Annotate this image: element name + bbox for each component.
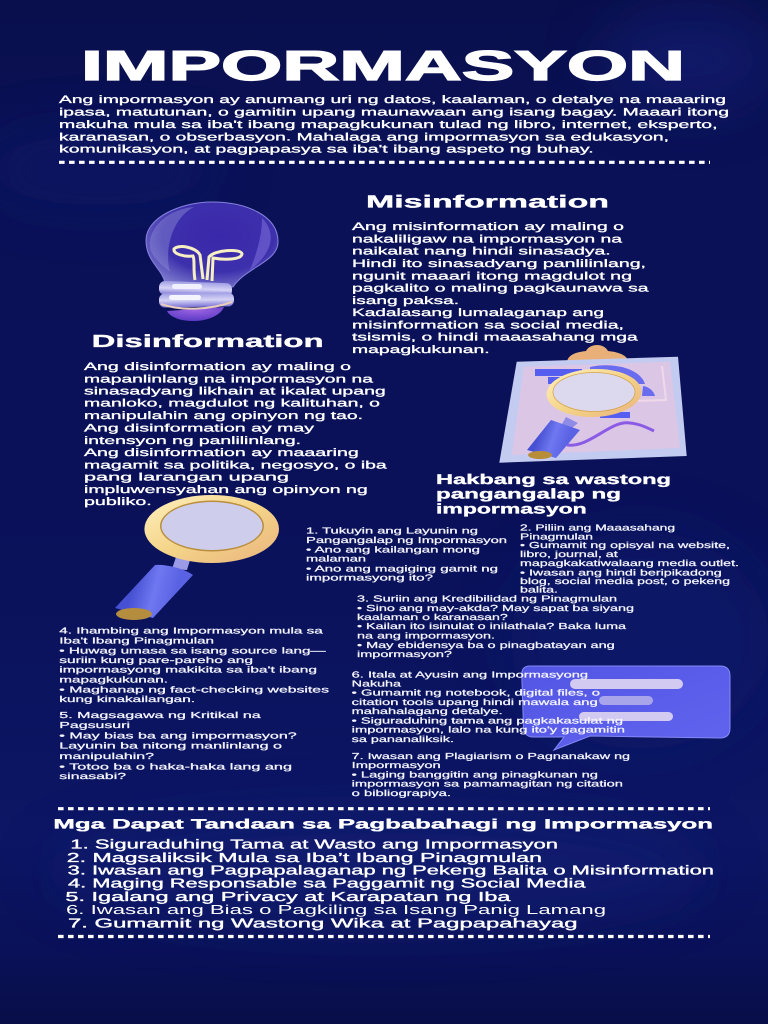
step 3: • Kailan ito isinulat o inilathala? Baka luma — [357, 621, 626, 631]
text block: disinformation: Ang disinformation ay may — [84, 422, 315, 434]
step 7: impormasyon sa pamamagitan ng citation — [352, 779, 623, 789]
text block: misinformation: Ang misinformation ay maling o — [352, 221, 624, 233]
text block: disinformation: publiko. — [84, 496, 152, 508]
step 6: 6. Itala at Ayusin ang Impormasyong — [352, 669, 588, 679]
icon: chat bubble — [522, 666, 730, 750]
text block: misinformation: pagkalito o maling pagkaunawa sa — [352, 283, 648, 295]
step 3 — [357, 594, 634, 659]
heading: reminders: Mga Dapat Tandaan sa Pagbabahagi ng Impormasyon — [53, 816, 713, 832]
step 2: libro, journal, at — [520, 549, 619, 559]
heading: steps: Hakbang sa wastong — [436, 471, 671, 487]
step 5: Pagsusuri — [59, 720, 130, 730]
step 5: manipulahin? — [59, 751, 154, 761]
step 5: sinasabi? — [59, 771, 126, 781]
step 7: • Laging banggitin ang pinagkunan ng — [352, 770, 598, 780]
title: IMPORMASYON — [81, 42, 685, 89]
step 4: suriin kung pare-pareho ang — [59, 655, 253, 665]
text block: misinformation: tsismis, o hindi maaasahang mga — [352, 332, 638, 344]
step 4: 4. Ihambing ang Impormasyon mula sa — [59, 625, 323, 635]
step 6: • Gumamit ng notebook, digital files, o — [352, 688, 600, 698]
list: reminders: 1. Siguraduhing Tama at Wasto ang Impormasyon — [70, 836, 558, 851]
text block: disinformation: mapanlinlang na impormasyon na — [84, 373, 373, 385]
text block: disinformation: manipulahin ang opinyon ng tao. — [84, 410, 363, 422]
step 6: • Siguraduhing tama ang pagkakasulat ng — [352, 715, 623, 725]
text block: misinformation: misinformation sa social media, — [352, 319, 624, 331]
step 2: • Gumamit ng opisyal na website, — [520, 540, 730, 550]
text block: misinformation: Kadalasang lumalaganap ang — [352, 307, 604, 319]
step 6: impormasyon, lalo na kung ito'y gagamitin — [352, 725, 625, 735]
step 2 — [520, 523, 739, 595]
text block: misinformation: ngunit maaari itong magdulot ng — [352, 270, 632, 282]
list: reminders: 2. Magsaliksik Mula sa Iba’t Ibang Pinagmulan — [67, 850, 542, 865]
text block: disinformation: intensyon ng panlilinlang. — [84, 435, 301, 447]
step 6: Nakuha — [352, 678, 401, 688]
step 4: kung kinakailangan. — [59, 694, 195, 704]
step 1: 1. Tukuyin ang Layunin ng — [306, 525, 478, 535]
intro paragraph: karanasan, o obserbasyon. Mahalaga ang impormasyon sa edukasyon, — [59, 131, 669, 143]
step 2: mapagkakatiwalaang media outlet. — [520, 558, 739, 568]
step 5: • May bias ba ang impormasyon? — [59, 730, 297, 740]
list: reminders: 6. Iwasan ang Bias o Pagkiling sa Isang Panig Lamang — [66, 902, 606, 917]
heading: steps: impormasyon — [436, 500, 587, 516]
text block: misinformation: naikalat nang hindi sinasadya. — [352, 246, 611, 258]
intro paragraph: Ang impormasyon ay anumang uri ng datos, kaalaman, o detalye na maaaring — [59, 94, 726, 106]
step 2: blog, social media post, o pekeng — [520, 576, 730, 586]
step 7 — [352, 751, 630, 798]
text block: misinformation — [352, 221, 648, 356]
text block: misinformation: mapagkukunan. — [352, 344, 490, 356]
step 2: • Iwasan ang hindi beripikadong — [520, 567, 722, 577]
step 5: • Totoo ba o haka-haka lang ang — [59, 761, 292, 771]
step 1: impormasyong ito? — [306, 573, 433, 583]
step 2: 2. Piliin ang Maaasahang — [520, 523, 675, 533]
list: reminders: 3. Iwasan ang Pagpapalaganap ng Pekeng Balita o Misinformation — [68, 862, 714, 878]
step 1: • Ano ang kailangan mong — [306, 545, 480, 555]
icon: light bulb — [146, 202, 278, 321]
step 3: kaalaman o karanasan? — [357, 612, 508, 622]
step 1 — [306, 525, 507, 583]
text block: disinformation: Ang disinformation ay maling o — [84, 361, 351, 373]
step 3: 3. Suriin ang Kredibilidad ng Pinagmulan — [357, 594, 617, 604]
list: reminders: 7. Gumamit ng Wastong Wika at Pagpapahayag — [68, 916, 578, 931]
step 7: o bibliograpiya. — [352, 788, 451, 798]
step 2: Pinagmulan — [520, 532, 593, 542]
step 5: Layunin ba nitong manlinlang o — [59, 741, 282, 751]
list: reminders: 4. Maging Responsable sa Paggamit ng Social Media — [68, 876, 587, 890]
step 2: balita. — [520, 585, 558, 595]
heading: misinformation: Misinformation — [366, 192, 609, 212]
text block: disinformation: Ang disinformation ay maaaring — [84, 447, 359, 459]
step 3: na ang impormasyon. — [357, 630, 495, 640]
text block: disinformation: pang larangan upang — [84, 472, 289, 484]
text block: disinformation: impluwensyahan ang opinyon ng — [84, 484, 368, 496]
text block: disinformation — [84, 361, 387, 508]
text block: disinformation: magamit sa politika, negosyo, o iba — [84, 459, 387, 471]
step 6: sa pananaliksik. — [352, 734, 454, 744]
step 4 — [59, 625, 330, 704]
step 3: • May ebidensya ba o pinagbatayan ang — [357, 640, 615, 650]
step 3: • Sino ang may-akda? May sapat ba siyang — [357, 603, 634, 613]
step 7: 7. Iwasan ang Plagiarism o Pagnanakaw ng — [352, 751, 630, 761]
text block: misinformation: isang paksa. — [352, 295, 459, 307]
icon: clipboard with magnifier — [499, 345, 687, 463]
intro paragraph: komunikasyon, at pagpapasya sa iba't ibang aspeto ng buhay. — [59, 144, 594, 156]
step 6: mahahalagang detalye. — [352, 706, 503, 716]
step 6: citation tools upang hindi mawala ang — [352, 697, 598, 707]
step 4: mapagkukunan. — [59, 674, 168, 684]
text block: disinformation: manloko, magdulot ng kalituhan, o — [84, 398, 380, 410]
list: reminders: 5. Igalang ang Privacy at Karapatan ng Iba — [65, 889, 512, 904]
step 4: impormasyong makikita sa iba't ibang — [59, 665, 317, 675]
step 4: • Maghanap ng fact-checking websites — [59, 684, 330, 694]
list: reminders — [65, 836, 714, 931]
intro paragraph — [59, 94, 729, 156]
step 6 — [352, 669, 625, 744]
step 1: malaman — [306, 554, 366, 564]
step 5 — [59, 710, 297, 781]
step 7: Impormasyon — [352, 760, 441, 770]
step 4: Iba't Ibang Pinagmulan — [59, 635, 214, 645]
intro paragraph: ipasa, matutunan, o gamitin upang maunawaan ang isang bagay. Maaari itong — [59, 106, 729, 118]
step 3: impormasyon? — [357, 649, 452, 659]
text block: misinformation: Hindi ito sinasadyang panlilinlang, — [352, 258, 646, 270]
step 4: • Huwag umasa sa isang source lang— — [59, 645, 326, 655]
step 1: • Ano ang magiging gamit ng — [306, 563, 498, 573]
step 1: Pangangalap ng Impormasyon — [306, 535, 507, 545]
heading: steps: pangangalap ng — [436, 486, 621, 502]
icon: magnifying glass — [115, 495, 279, 620]
text block: misinformation: nakaliligaw na impormasyon na — [352, 233, 622, 245]
step 5: 5. Magsagawa ng Kritikal na — [59, 710, 261, 720]
heading: disinformation: Disinformation — [92, 331, 324, 351]
intro paragraph: makuha mula sa iba't ibang mapagkukunan tulad ng libro, internet, eksperto, — [59, 119, 718, 131]
text block: disinformation: sinasadyang likhain at ikalat upang — [84, 386, 386, 398]
heading: steps — [436, 471, 671, 516]
